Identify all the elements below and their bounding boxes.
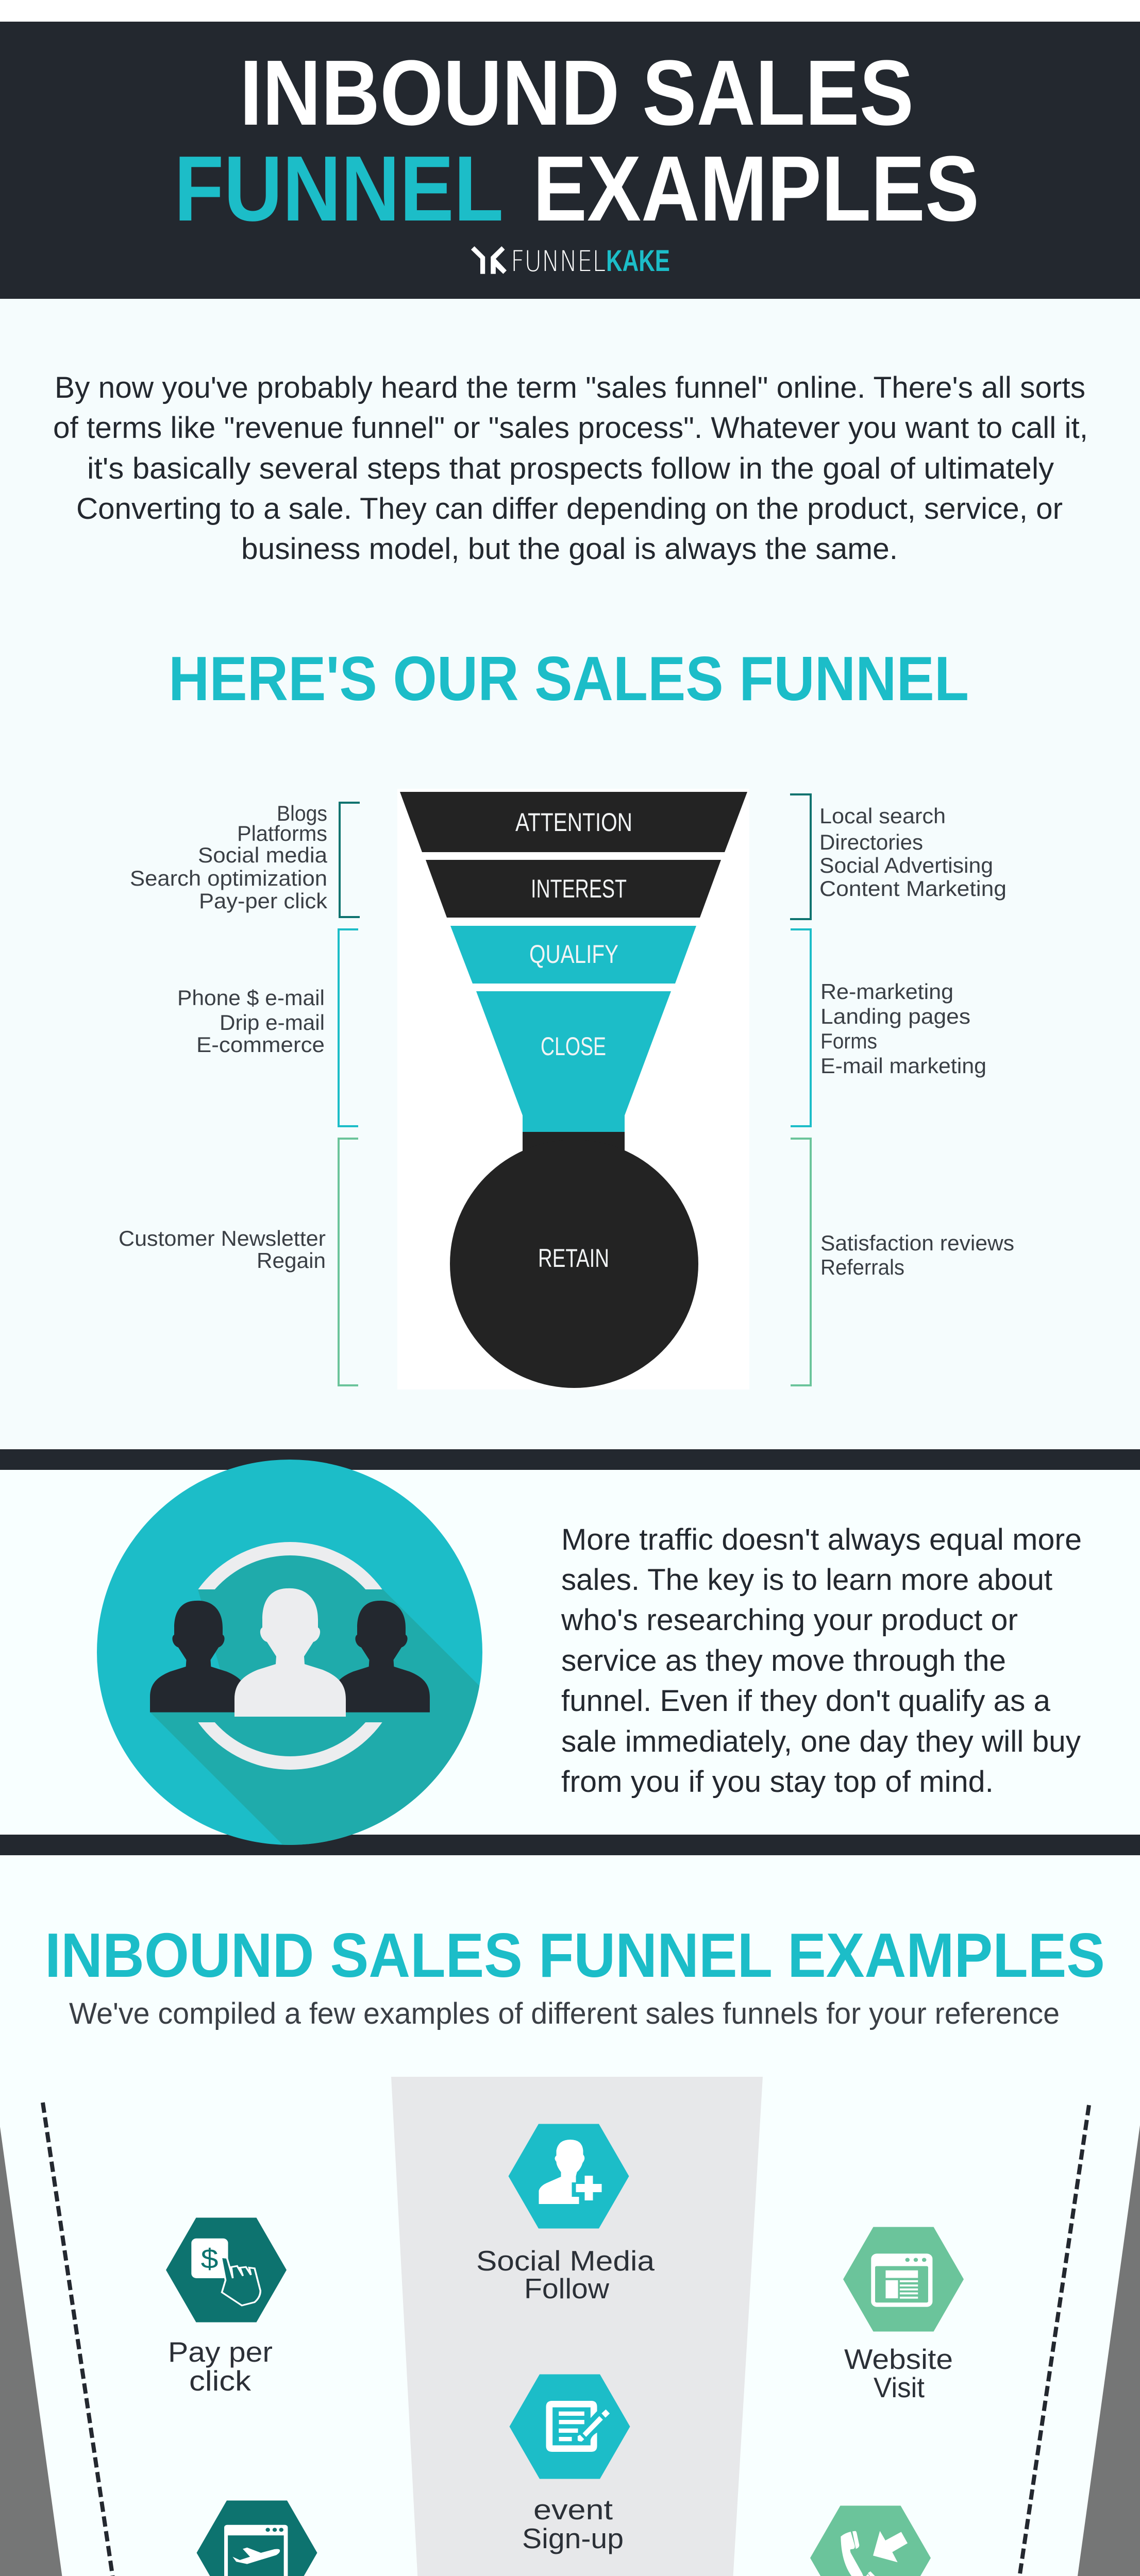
intro paragraph: it's basically several steps that prospects follow in the goal of ultimately (87, 452, 1054, 485)
example: pay per click: $ (201, 2243, 218, 2274)
logo: small FunnelKake: KAKE (606, 244, 670, 278)
text block: retain tactics left: Customer Newsletter (119, 1226, 326, 1250)
text block: attention and interest tactics right: Local search (819, 804, 946, 828)
text block: more traffic: sales. The key is to learn more about (561, 1563, 1052, 1597)
text block: attention and interest tactics right (819, 804, 1007, 901)
text block: more traffic: More traffic doesn't always equal more (561, 1523, 1082, 1556)
brackets: left column (339, 803, 360, 1385)
text block: attention and interest tactics left: Platforms (237, 821, 327, 845)
example: event sign-up: Sign-up (522, 2522, 624, 2554)
band: traffic section bottom bar (0, 1835, 1140, 1855)
logo: small FunnelKake: FUNNEL (511, 245, 606, 278)
funnel stage: attention (400, 792, 747, 852)
panel: header (0, 22, 1140, 299)
text block: retain tactics left: Regain (257, 1248, 326, 1273)
text block: more traffic: sale immediately, one day they will buy (561, 1725, 1081, 1758)
icon: audience circle (97, 1460, 482, 1845)
text block: retain tactics right (820, 1231, 1014, 1279)
intro paragraph: By now you've probably heard the term "sales funnel" online. There's all sorts (55, 371, 1085, 404)
text block: attention and interest tactics right: Directories (819, 830, 923, 854)
title (174, 41, 979, 241)
text block: attention and interest tactics left: Blogs (277, 801, 327, 825)
text block: more traffic: who's researching your product or (561, 1603, 1018, 1637)
text block: retain tactics right: Referrals (820, 1255, 904, 1279)
text block: qualify and close tactics right: Landing pages (820, 1004, 970, 1028)
text block: attention and interest tactics left: Pay-per click (199, 889, 328, 913)
funnel stage: qualify (450, 926, 696, 984)
text block: retain tactics right: Satisfaction reviews (820, 1231, 1014, 1255)
text block: qualify and close tactics right: Forms (820, 1029, 877, 1053)
text block: more traffic: funnel. Even if they don't qualify as a (561, 1684, 1051, 1718)
example: tracked phone call (798, 2506, 943, 2576)
example: social media follow (476, 2124, 655, 2304)
text block: attention and interest tactics left (130, 801, 328, 913)
subheading: We've compiled a few examples of different sales funnels for your reference (69, 1997, 1060, 2030)
text block: attention and interest tactics right: Content Marketing (819, 876, 1007, 901)
example: website visit: Visit (874, 2371, 925, 2403)
heading: here's our sales funnel: HERE'S OUR SALES FUNNEL (169, 643, 969, 714)
example: pay per click: Pay per (168, 2336, 273, 2368)
example: website visit: Website (844, 2343, 953, 2375)
funnel stage: interest: INTEREST (531, 874, 627, 903)
band: traffic section top bar (0, 1449, 1140, 1470)
example: website visit (843, 2227, 964, 2403)
example: pay per click: click (189, 2365, 252, 2397)
text block: qualify and close tactics left: Phone $ e-mail (177, 986, 325, 1010)
example: event sign-up: event (533, 2494, 613, 2526)
intro paragraph: business model, but the goal is always the same. (241, 532, 898, 566)
funnel stage: qualify: QUALIFY (529, 940, 618, 969)
text block: qualify and close tactics left (177, 986, 325, 1057)
arrow: left dashed path (43, 2103, 499, 2576)
text block: more traffic: service as they move through the (561, 1644, 1006, 1677)
text block: more traffic (561, 1523, 1082, 1799)
funnel stage: close: CLOSE (541, 1032, 606, 1061)
funnel side: right grey (937, 2125, 1140, 2576)
example: event sign-up (509, 2374, 630, 2554)
text block: qualify and close tactics right: Re-marketing (820, 979, 953, 1004)
funnel stage: retain: RETAIN (538, 1244, 609, 1273)
example: pay per click (166, 2217, 287, 2397)
example: social media follow: Follow (524, 2273, 609, 2304)
intro paragraph: of terms like "revenue funnel" or "sales process". Whatever you want to call it, (53, 411, 1088, 445)
text block: attention and interest tactics right: Social Advertising (819, 853, 993, 877)
funnel stage: retain (450, 1132, 698, 1388)
text block: attention and interest tactics left: Social media (198, 843, 328, 867)
brackets: right column (790, 794, 811, 1385)
title: EXAMPLES (533, 137, 979, 241)
text block: qualify and close tactics left: E-commerce (196, 1032, 325, 1057)
example: landing page (197, 2501, 317, 2576)
funnel centre: light grey channel (391, 2077, 763, 2576)
example: social media follow: Social Media (476, 2245, 655, 2277)
funnel side: left grey (0, 2127, 202, 2576)
text block: retain tactics left (119, 1226, 326, 1273)
text block: qualify and close tactics left: Drip e-mail (220, 1010, 325, 1035)
text block: qualify and close tactics right: E-mail marketing (820, 1054, 986, 1078)
text block: attention and interest tactics left: Search optimization (130, 866, 327, 890)
title: INBOUND SALES (240, 41, 914, 145)
intro paragraph (53, 371, 1088, 566)
panel: sales funnel diagram (397, 789, 749, 1389)
text block: qualify and close tactics right (820, 979, 986, 1078)
funnel stage: interest (426, 860, 721, 918)
text block: more traffic: from you if you stay top of mind. (561, 1765, 994, 1799)
funnel stage: attention: ATTENTION (515, 808, 632, 837)
logo: small FunnelKake (471, 244, 670, 278)
title: FUNNEL (174, 137, 504, 241)
funnel stage: close (476, 991, 671, 1132)
intro paragraph: Converting to a sale. They can differ depending on the product, service, or (76, 492, 1063, 526)
arrow: right dashed path (633, 2105, 1089, 2576)
